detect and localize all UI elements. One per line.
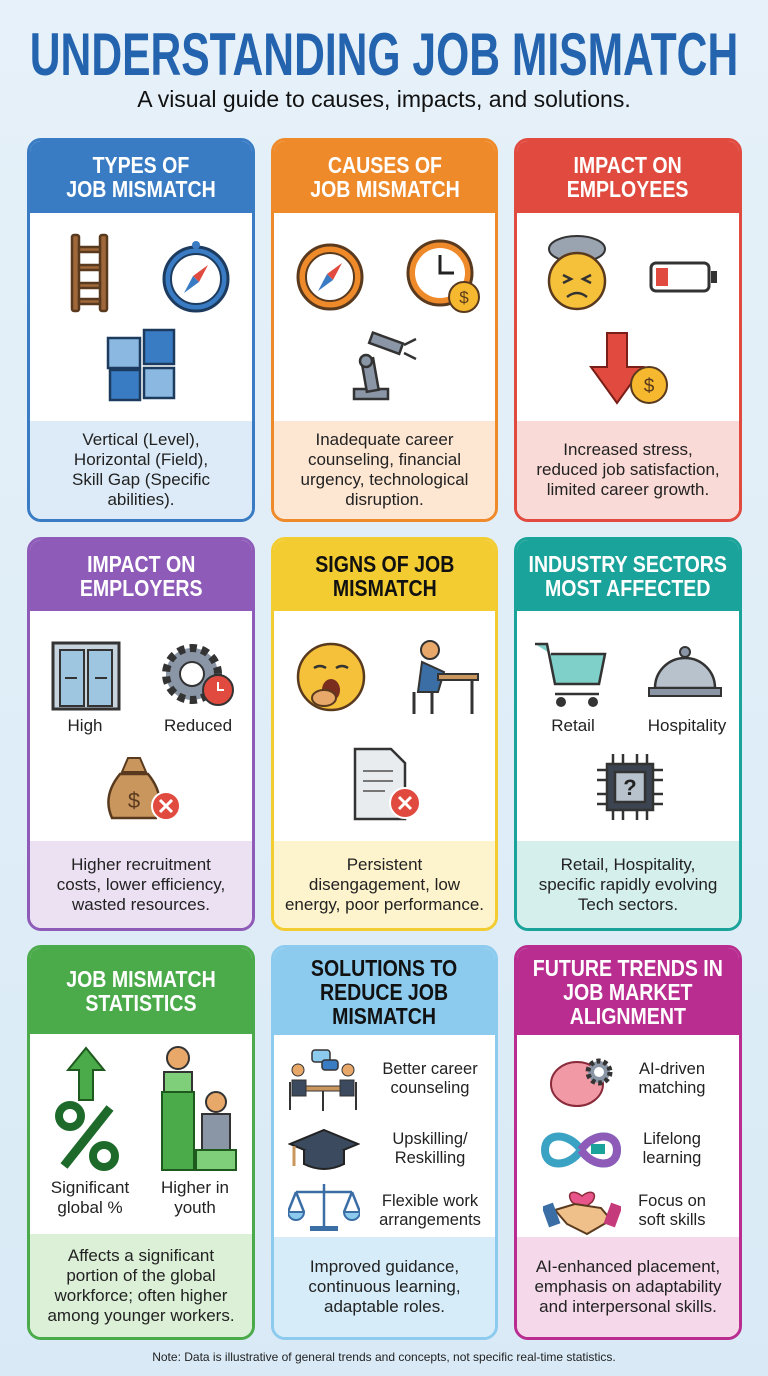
icon: clock with coin: $ (459, 288, 469, 307)
icon: document with x (354, 748, 419, 820)
heading: TYPES OF (93, 152, 189, 178)
footer text: among younger workers. (47, 1306, 235, 1324)
icon: microchip (597, 754, 663, 820)
label: hospitality: Hospitality (648, 716, 726, 735)
heading: SOLUTIONS TO (311, 954, 458, 980)
footer text (517, 1237, 739, 1337)
panel: impact on employers (27, 537, 255, 931)
heading (274, 141, 495, 213)
icon: brain gear (550, 1058, 612, 1107)
heading: REDUCE JOB (320, 978, 449, 1004)
label: upskilling (392, 1130, 468, 1167)
icon: down arrow coin: $ (644, 376, 655, 397)
label: ai-driven: AI-driven (639, 1060, 705, 1078)
footer text (30, 421, 252, 519)
label: significant global: Significant (51, 1178, 129, 1197)
icon: people on bars (161, 1046, 237, 1171)
icon: clock with coin (406, 240, 480, 313)
footer text: Inadequate career (316, 430, 454, 449)
label: lifelong learning: learning (643, 1149, 701, 1167)
label: soft skills (638, 1192, 706, 1229)
footer text: Horizontal (Field), (74, 450, 208, 469)
footer text: urgency, technological (301, 470, 468, 489)
footer text: and interpersonal skills. (539, 1297, 717, 1316)
heading: SIGNS OF JOB (315, 550, 454, 576)
icon: infinity (541, 1132, 621, 1168)
label: flexible work: arrangements (379, 1211, 481, 1229)
panel: types of job mismatch (27, 138, 255, 522)
heading: JOB MARKET (563, 978, 693, 1004)
label: higher in youth: Higher in (161, 1178, 229, 1197)
footer text (30, 841, 252, 928)
heading (517, 948, 739, 1035)
label: lifelong learning (643, 1130, 701, 1167)
heading: INDUSTRY SECTORS (529, 550, 727, 576)
heading: JOB MISMATCH (66, 966, 216, 992)
footer text (517, 841, 739, 928)
panel: impact on employees (514, 138, 742, 522)
icon: puzzle (106, 328, 176, 402)
footer text: disengagement, low (309, 874, 460, 894)
icon: broken compass (296, 244, 364, 310)
heading (30, 948, 252, 1034)
icon: yawning face (296, 642, 366, 712)
icon: person at desk (412, 640, 479, 714)
footer text: portion of the global (66, 1266, 216, 1284)
heading: FUTURE TRENDS IN (533, 954, 723, 980)
label: better career counseling: counseling (391, 1079, 469, 1097)
icon: grad cap (288, 1128, 360, 1170)
footer text: AI-enhanced placement, (536, 1257, 720, 1276)
footer text: counseling, financial (308, 450, 461, 469)
icon: counseling (289, 1049, 357, 1111)
footer text: energy, poor performance. (285, 894, 484, 914)
heading: EMPLOYERS (80, 574, 202, 600)
icon: gear with clock (162, 644, 234, 706)
footer text: Persistent (347, 854, 422, 874)
icon: ladder (70, 234, 108, 312)
heading: IMPACT ON (87, 550, 195, 576)
heading: CAUSES OF (327, 152, 442, 178)
footer text (517, 421, 739, 519)
icon: money bag (107, 757, 179, 820)
icon: handshake heart (543, 1192, 621, 1236)
footer text: Retail, Hospitality, (561, 854, 695, 874)
icon: scales (288, 1184, 360, 1231)
footer text: Affects a significant (68, 1246, 214, 1264)
footer text: workforce; often higher (55, 1286, 227, 1304)
footer text: continuous learning, (308, 1277, 461, 1296)
footer text (30, 1234, 252, 1337)
icon: shopping cart (535, 642, 606, 707)
footer text: Skill Gap (Specific (72, 470, 210, 489)
footer text: adaptable roles. (324, 1297, 445, 1316)
footer text: Increased stress, (563, 440, 693, 459)
panel: statistics (27, 945, 255, 1340)
footnote: Note: Data is illustrative of general trends and concepts, not specific real-time statistics. (152, 1350, 616, 1364)
heading: STATISTICS (85, 990, 197, 1016)
label: soft skills: soft skills (639, 1211, 705, 1229)
heading (517, 540, 739, 611)
icon: revolving door (52, 642, 120, 710)
footer text (274, 1237, 495, 1337)
icon: service bell (648, 646, 722, 697)
heading (274, 948, 495, 1035)
label: flexible work (379, 1192, 481, 1229)
icon: down arrow coin (589, 332, 668, 405)
icon: stressed face (548, 235, 606, 310)
footer text: Tech sectors. (578, 894, 678, 914)
heading: EMPLOYEES (567, 176, 689, 202)
heading (30, 540, 252, 611)
subtitle: A visual guide to causes, impacts, and solutions. (137, 86, 631, 112)
icon: money bag: $ (128, 788, 140, 813)
footer text: costs, lower efficiency, (57, 874, 225, 894)
icon: microchip: ? (623, 775, 637, 800)
panel: industry sectors (514, 537, 742, 931)
label: higher in youth (161, 1178, 229, 1217)
footer text (274, 421, 495, 519)
label: flexible work: Flexible work (382, 1192, 478, 1210)
label: better career counseling (382, 1060, 478, 1097)
label: better career counseling: Better career (382, 1060, 478, 1078)
heading (274, 540, 495, 611)
heading: JOB MISMATCH (310, 176, 459, 202)
footer text: Improved guidance, (310, 1257, 459, 1276)
panel: signs of job mismatch (271, 537, 498, 931)
heading: IMPACT ON (574, 152, 682, 178)
label: ai-driven (639, 1060, 705, 1097)
footer text: reduced job satisfaction, (536, 460, 720, 479)
footer text: wasted resources. (72, 894, 210, 914)
heading: ALIGNMENT (570, 1002, 686, 1028)
panel: solutions (271, 945, 498, 1340)
footer text (274, 841, 495, 928)
footer text: limited career growth. (547, 480, 709, 499)
label: reduced: Reduced (164, 716, 232, 735)
heading: MISMATCH (333, 1002, 436, 1028)
heading (517, 141, 739, 213)
footer text: disruption. (345, 490, 424, 509)
label: retail: Retail (551, 716, 595, 735)
icon: compass (162, 241, 230, 312)
label: high: High (68, 716, 102, 735)
heading (30, 141, 252, 213)
label: significant global: global % (57, 1198, 123, 1217)
label: upskilling: Upskilling/ (392, 1130, 468, 1148)
footer text: Vertical (Level), (82, 430, 200, 449)
icon: robot arm (352, 331, 416, 400)
label: ai-driven: matching (639, 1079, 705, 1097)
footer text: emphasis on adaptability (534, 1277, 722, 1296)
title: UNDERSTANDING JOB MISMATCH (30, 21, 738, 88)
icon: low battery (650, 262, 717, 292)
label: significant global (51, 1178, 130, 1217)
footer text: specific rapidly evolving (539, 874, 717, 894)
panel: future trends (514, 945, 742, 1340)
label: higher in youth: youth (174, 1198, 216, 1217)
icon: percent with arrow (55, 1046, 119, 1171)
label: soft skills: Focus on (638, 1192, 706, 1210)
footer text: abilities). (107, 490, 175, 509)
footer text: Higher recruitment (71, 854, 211, 874)
label: lifelong learning: Lifelong (643, 1130, 701, 1148)
heading: JOB MISMATCH (66, 176, 216, 202)
heading: MOST AFFECTED (545, 574, 711, 600)
label: upskilling: Reskilling (395, 1149, 465, 1167)
heading: MISMATCH (333, 574, 436, 600)
panel: causes (271, 138, 498, 522)
